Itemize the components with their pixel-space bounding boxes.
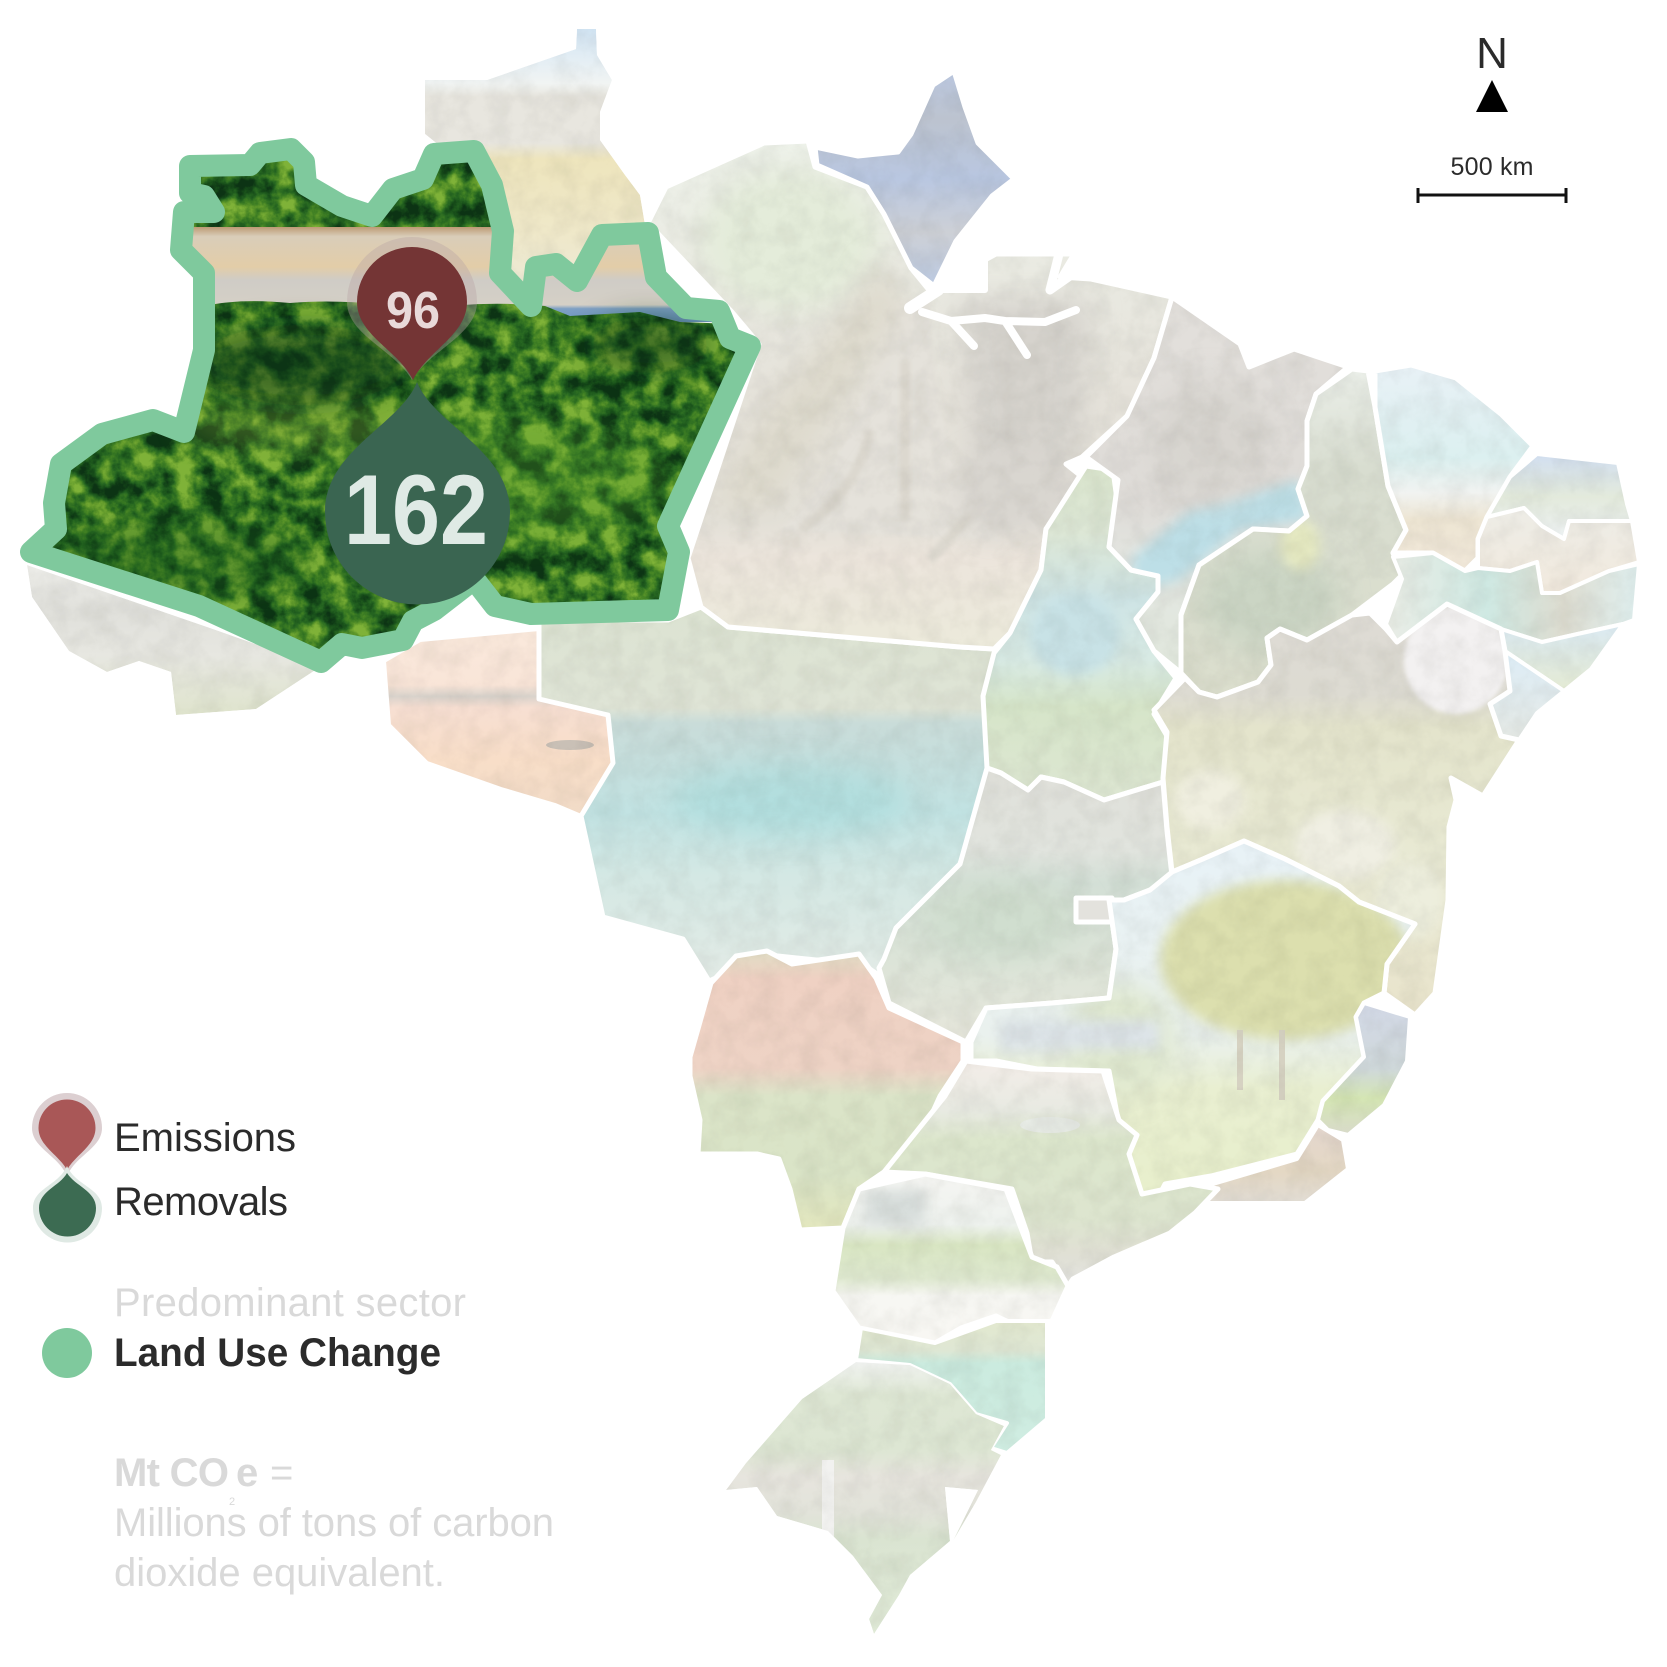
legend: predominant sector: Land Use Change bbox=[114, 1331, 441, 1375]
state: Paraiba bbox=[1478, 508, 1639, 593]
legend: removals bbox=[33, 1166, 288, 1242]
state: Sergipe bbox=[1493, 654, 1563, 738]
state: Rio Grande do Sul bbox=[726, 1362, 1004, 1634]
state: Sao Paulo bbox=[884, 1061, 1218, 1286]
state: Amapa bbox=[815, 71, 1014, 286]
state: Rio Grande do Norte bbox=[1492, 456, 1630, 536]
legend: emissions bbox=[32, 1093, 296, 1176]
state: Acre bbox=[27, 565, 320, 715]
icon: land use change dot bbox=[42, 1328, 92, 1378]
state: Alagoas bbox=[1501, 624, 1623, 691]
legend: predominant sector bbox=[42, 1281, 466, 1378]
state: Tocantins bbox=[983, 466, 1176, 800]
state: Mato Grosso do Sul bbox=[690, 951, 963, 1230]
note: unit definition: Millions of tons of carbon bbox=[114, 1501, 554, 1545]
state: Bahia bbox=[1154, 604, 1519, 1015]
state: Espirito Santo bbox=[1318, 1003, 1410, 1135]
note: unit definition: 2 bbox=[229, 1496, 235, 1508]
state: Goias bbox=[879, 768, 1172, 1042]
state: Maranhao bbox=[1086, 297, 1348, 673]
pin: removals 162: 162 bbox=[344, 454, 488, 565]
state: Santa Catarina bbox=[856, 1321, 1047, 1453]
Marajo island coast lines bbox=[910, 242, 1090, 355]
state: Ceara bbox=[1375, 365, 1533, 571]
north arrow bbox=[1476, 29, 1508, 112]
pin: emissions 96: 96 bbox=[386, 282, 440, 340]
state: Piaui bbox=[1181, 369, 1406, 697]
legend: removals: Removals bbox=[114, 1180, 288, 1224]
north arrow: N bbox=[1476, 29, 1508, 78]
note: unit definition: e bbox=[236, 1451, 258, 1495]
outline: predominant sector land use change bbox=[31, 149, 750, 662]
highlighted state: Amazonas bbox=[20, 140, 760, 680]
state: Parana bbox=[833, 1174, 1068, 1343]
note: unit definition: dioxide equivalent. bbox=[114, 1551, 445, 1595]
note: unit definition: = bbox=[270, 1451, 293, 1495]
pin: removals 162 bbox=[325, 382, 510, 604]
state: Mato Grosso bbox=[539, 607, 1002, 981]
icon: emissions drop bbox=[32, 1093, 102, 1176]
state: Rondonia bbox=[384, 629, 613, 816]
state: Pernambuco bbox=[1386, 553, 1639, 642]
state: Rio de Janeiro bbox=[1210, 1128, 1346, 1201]
scale bar bbox=[1418, 153, 1566, 203]
note: unit definition: Mt CO bbox=[114, 1451, 229, 1495]
state: Distrito Federal bbox=[1076, 898, 1112, 922]
state: Para bbox=[648, 141, 1172, 649]
scale bar: 500 km bbox=[1450, 153, 1534, 181]
state: Roraima bbox=[425, 29, 644, 282]
legend: predominant sector: Predominant sector bbox=[114, 1281, 466, 1325]
note: unit definition bbox=[114, 1451, 554, 1595]
state: Minas Gerais bbox=[971, 841, 1415, 1194]
pin: emissions 96 bbox=[347, 237, 477, 380]
legend: emissions: Emissions bbox=[114, 1116, 296, 1160]
photo: river and rainforest bbox=[20, 140, 760, 680]
